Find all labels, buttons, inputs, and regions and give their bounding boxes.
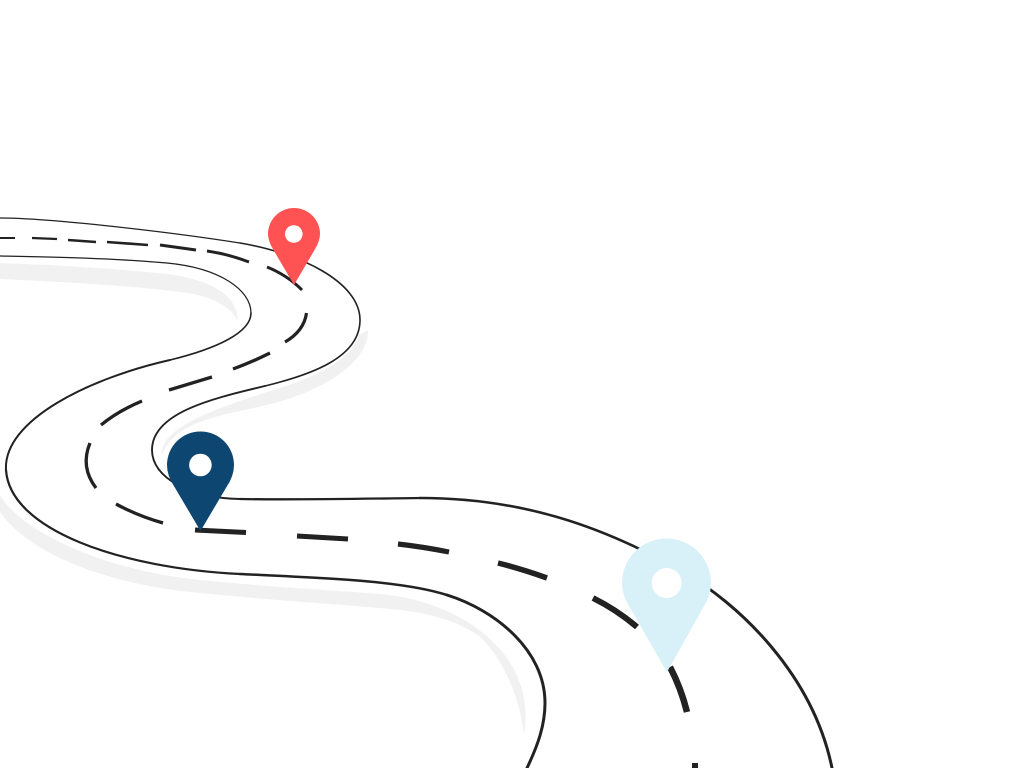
road surface — [0, 218, 832, 768]
pin: red — [268, 208, 320, 285]
road shadow — [0, 263, 526, 735]
pin: navy — [167, 432, 234, 531]
road centre dashes — [0, 238, 695, 768]
road edges — [0, 218, 832, 768]
pin: light blue — [622, 538, 711, 672]
